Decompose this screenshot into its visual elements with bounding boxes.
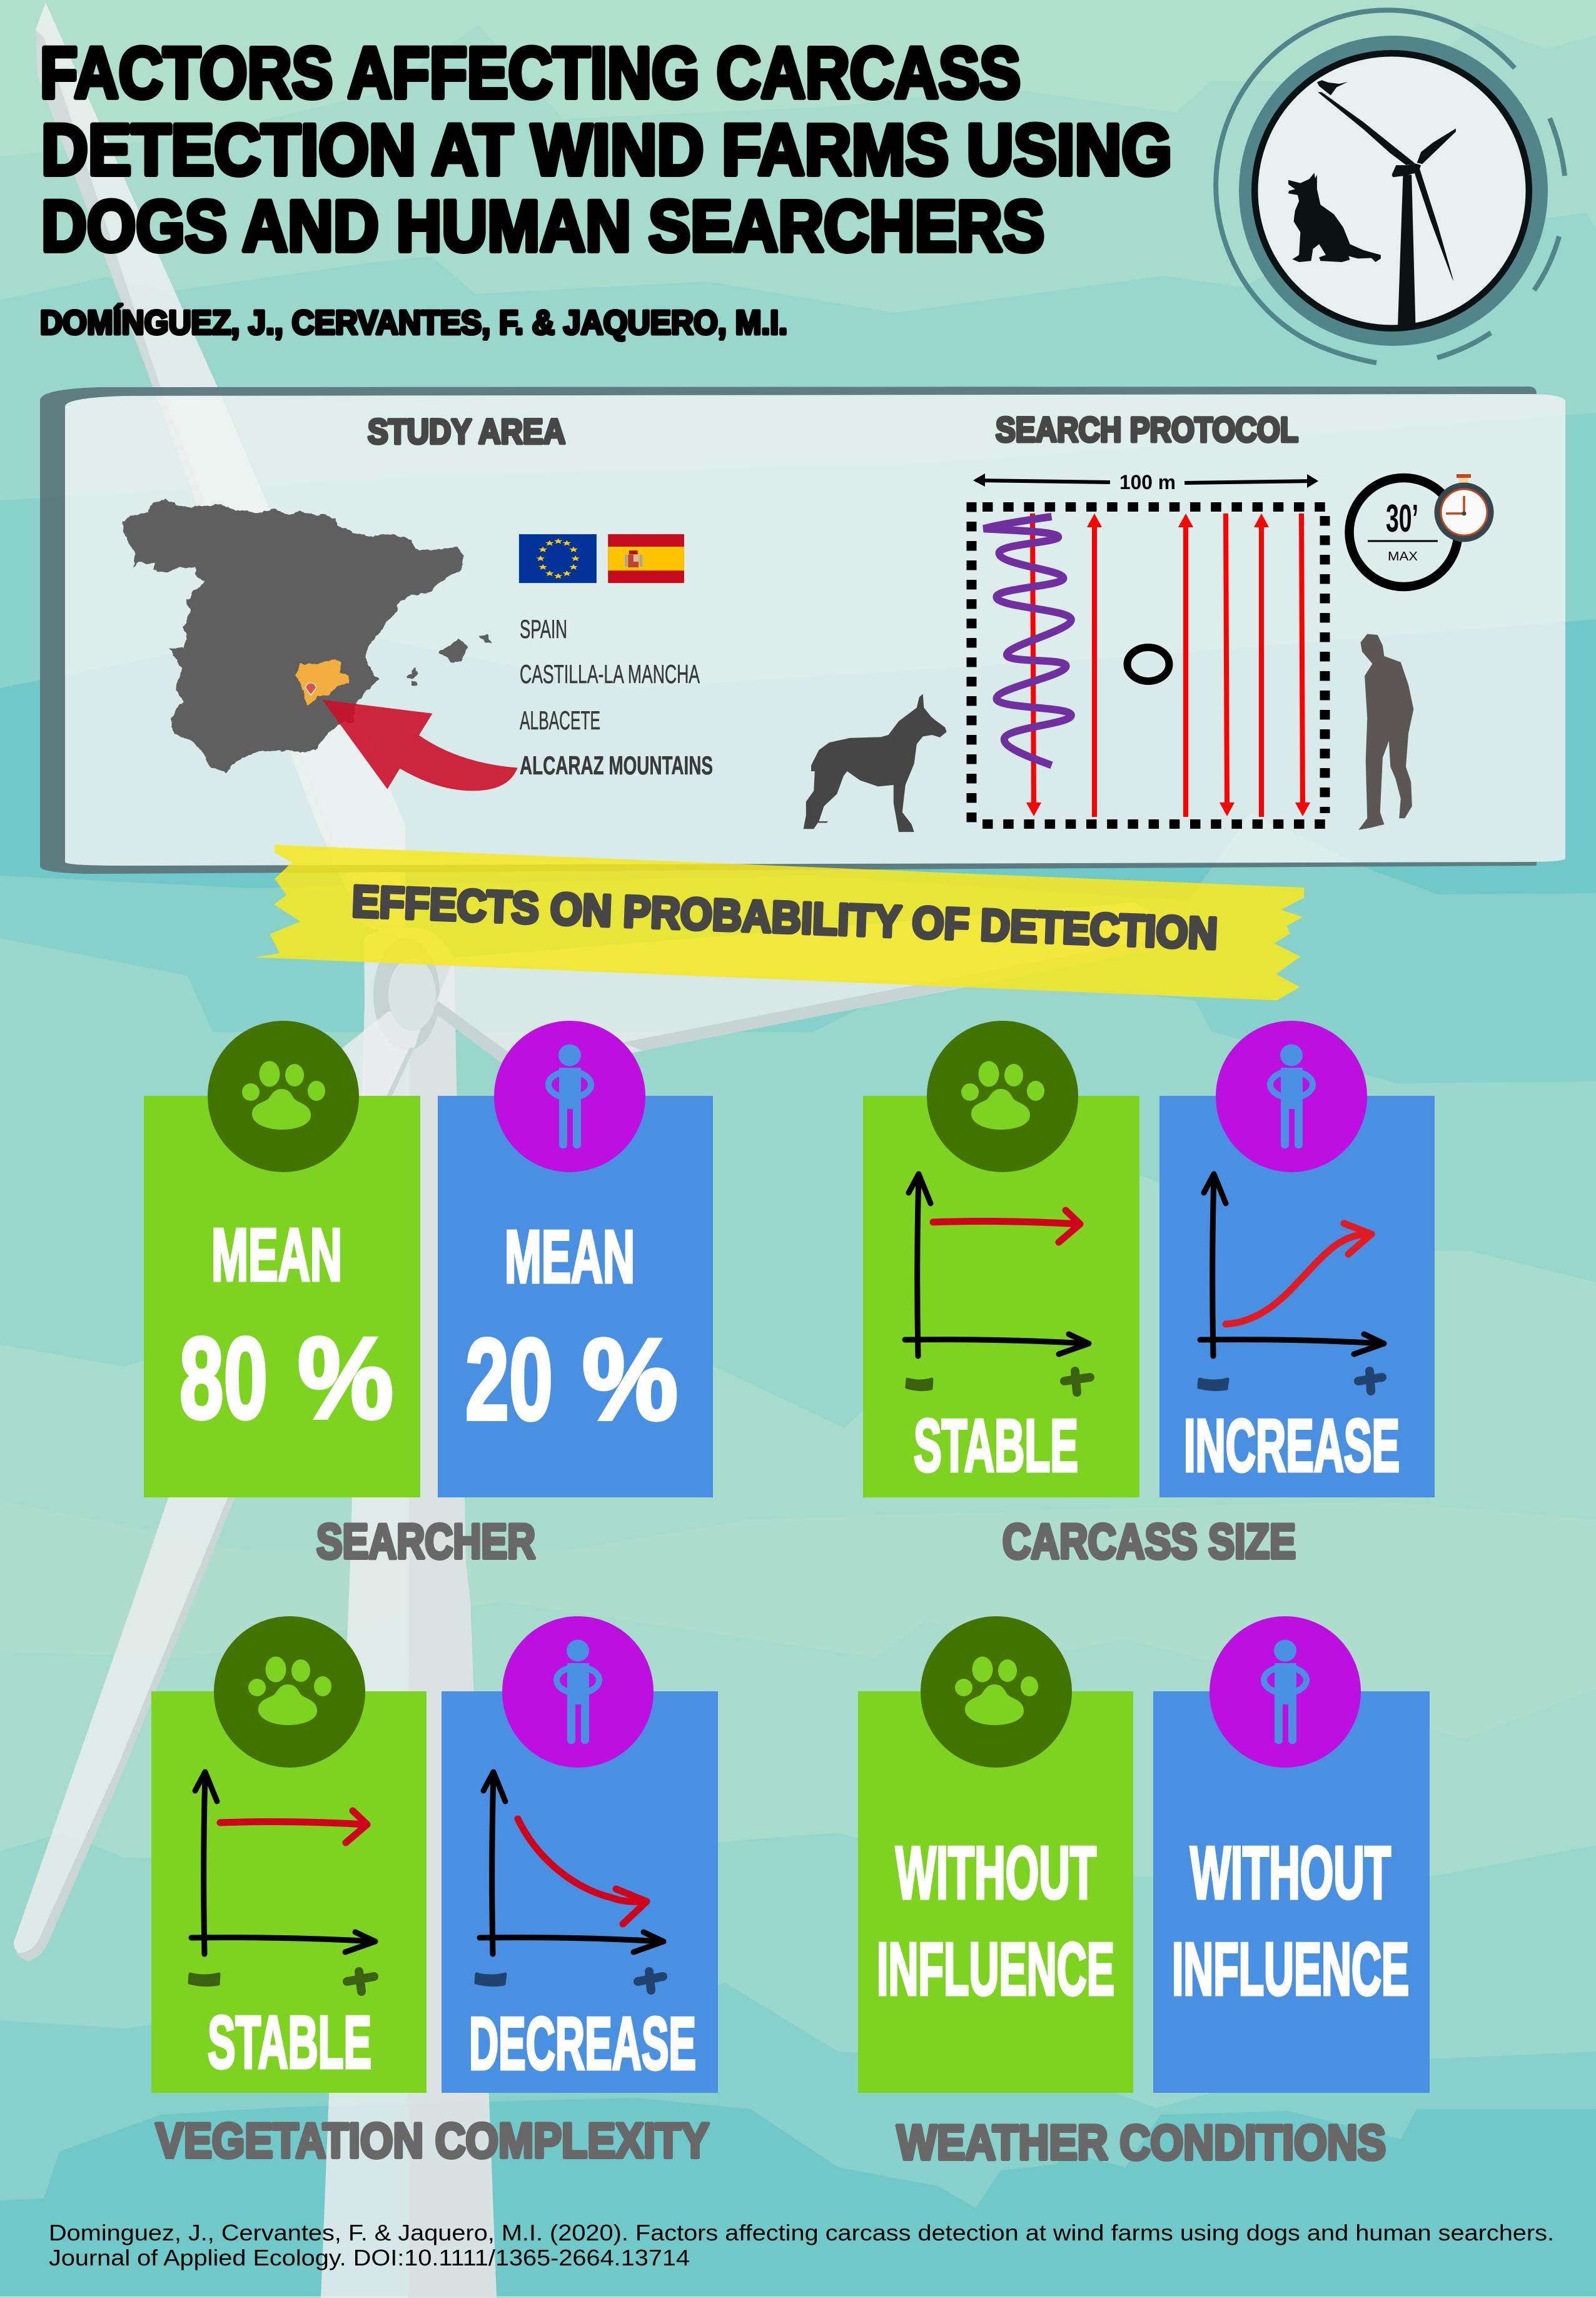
human silhouette [1358, 634, 1413, 830]
location list: CASTILLA-LA MANCHA [520, 659, 700, 689]
dimension arrow: 100 m [973, 471, 1318, 494]
human card: decrease [442, 1616, 718, 2093]
flag: Spain [608, 534, 684, 583]
icon: 30 minute max timer [1350, 474, 1493, 587]
human card: mean 20 % [438, 1021, 713, 1497]
dog card: mean 80 % [144, 1021, 420, 1497]
caption: carcass size: CARCASS SIZE [1003, 1514, 1296, 1569]
reference citation: Journal of Applied Ecology. DOI:10.1111/1365-2664.13714 [49, 2245, 690, 2270]
icon: red arrow to Alcaraz Mountains [322, 700, 518, 791]
flag: European Union [519, 534, 597, 583]
title: DOGS AND HUMAN SEARCHERS [41, 186, 1044, 266]
dog card: without influence: WITHOUT [896, 1831, 1096, 1915]
human card: mean 20 %: 20 [465, 1315, 553, 1444]
human card: decrease: DECREASE [469, 2002, 696, 2085]
dog card: mean 80 %: 80 [179, 1314, 268, 1443]
caption: weather conditions: WEATHER CONDITIONS [897, 2115, 1386, 2170]
dog search path: purple zigzag [984, 517, 1071, 765]
dog card: stable [863, 1021, 1139, 1497]
dog card: stable: STABLE [914, 1404, 1078, 1487]
icon: 30 minute max timer: 30’ [1386, 497, 1418, 540]
title [40, 33, 1172, 266]
dog silhouette [804, 694, 947, 832]
banner: effects on probability of detection [255, 845, 1304, 1000]
human card: without influence: WITHOUT [1190, 1831, 1391, 1915]
dog card: stable: STABLE [208, 2001, 371, 2084]
panel: study area and search protocol [40, 387, 1565, 874]
dog card: without influence: INFLUENCE [877, 1928, 1114, 2011]
icon: 30 minute max timer: MAX [1388, 550, 1418, 564]
title: DETECTION AT WIND FARMS USING [41, 110, 1172, 190]
human card: without influence: INFLUENCE [1172, 1928, 1409, 2011]
location list: ALCARAZ MOUNTAINS [520, 751, 713, 780]
map pin [306, 683, 316, 695]
authors: DOMÍNGUEZ, J., CERVANTES, F. & JAQUERO, M.I. [40, 304, 787, 342]
human card: increase: INCREASE [1184, 1404, 1400, 1487]
heading: study area: STUDY AREA [368, 412, 565, 451]
location list [520, 614, 713, 780]
location list: SPAIN [520, 614, 567, 644]
panel: weather conditions [858, 1616, 1430, 2170]
panel: vegetation complexity [151, 1616, 718, 2168]
dog card: mean 80 %: % [298, 1314, 393, 1443]
caption: vegetation complexity: VEGETATION COMPLEXITY [156, 2113, 709, 2168]
panel: searcher [144, 1021, 713, 1569]
human card: mean 20 %: % [582, 1315, 678, 1444]
dimension arrow: 100 m: 100 m [1119, 471, 1176, 494]
human card: without influence [1153, 1616, 1430, 2093]
map of Spain [123, 499, 492, 774]
dog card: without influence [858, 1616, 1133, 2093]
dog card: mean 80 %: MEAN [211, 1213, 342, 1297]
caption: searcher: SEARCHER [316, 1514, 535, 1569]
background wind turbine [14, 3, 1163, 2298]
banner: effects on probability of detection: EFFECTS ON PROBABILITY OF DETECTION [351, 877, 1218, 959]
diagram: search plot [972, 502, 1326, 829]
reference citation: Dominguez, J., Cervantes, F. & Jaquero, M.I. (2020). Factors affecting carcass detection at wind farms using dogs and human searchers. [49, 2220, 1554, 2245]
reference citation [49, 2220, 1554, 2270]
heading: search protocol: SEARCH PROTOCOL [996, 410, 1298, 449]
location list: ALBACETE [520, 706, 600, 735]
logo: turbine, bird and dog in circle [1216, 10, 1565, 363]
panel: carcass size [863, 1021, 1435, 1569]
dog card: stable [151, 1616, 427, 2093]
title: FACTORS AFFECTING CARCASS [40, 33, 1021, 113]
human card: mean 20 %: MEAN [505, 1215, 635, 1298]
human card: increase [1159, 1021, 1435, 1497]
